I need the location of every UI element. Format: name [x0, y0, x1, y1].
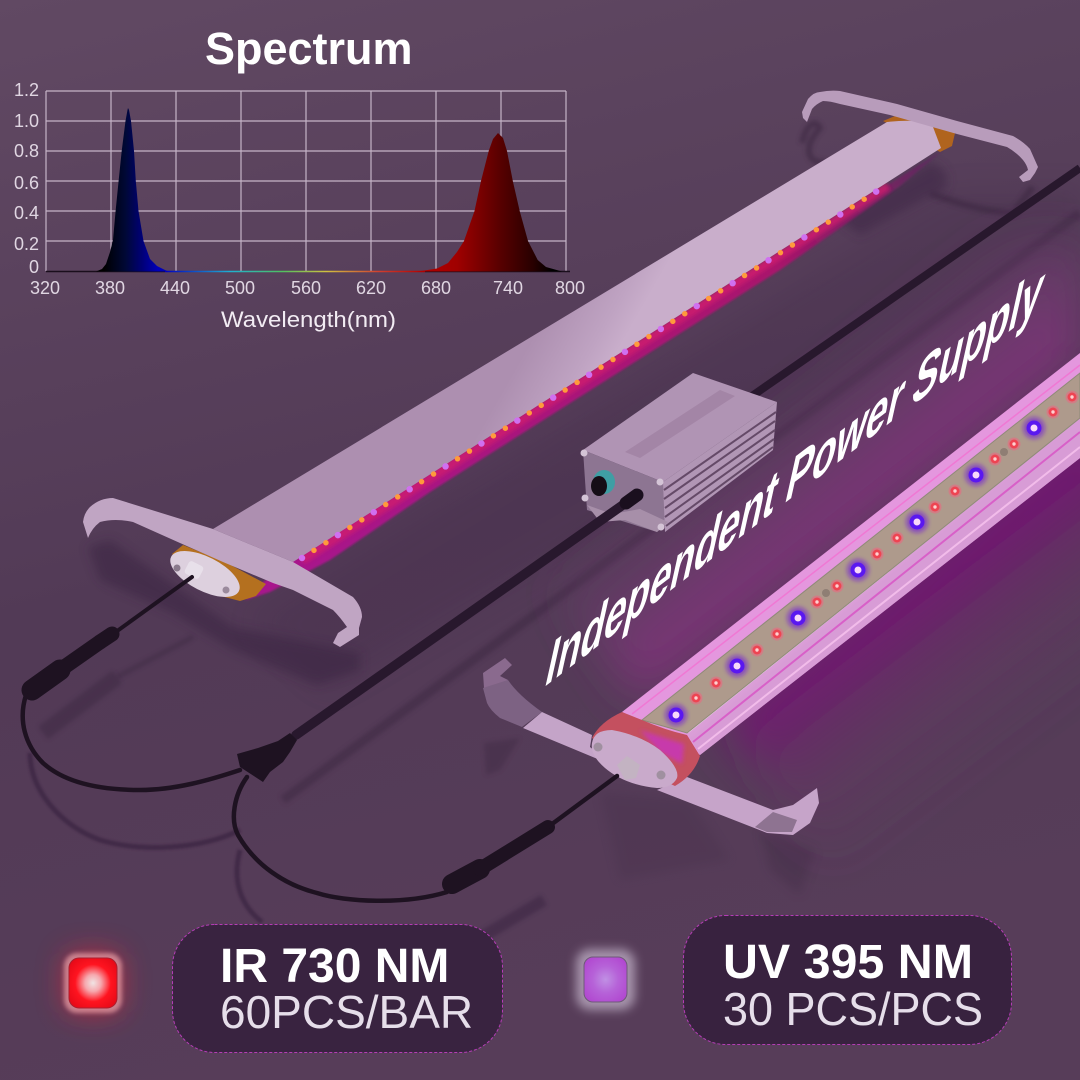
right connector cable — [234, 776, 617, 901]
IR 730 nm peak — [418, 133, 562, 272]
driver front face — [583, 450, 668, 532]
end plate with connector — [163, 542, 247, 606]
LED strip underside — [245, 150, 943, 600]
plug — [237, 733, 297, 782]
icon: red IR LED — [64, 952, 122, 1014]
x axis labels: 500 — [225, 278, 255, 298]
red LED row — [302, 184, 888, 558]
badge: UV 395 NM — [684, 916, 1012, 1044]
driver bolts — [580, 450, 664, 530]
UV LED row — [302, 184, 888, 558]
headline: Independent Power Supply: Independent Power Supply — [540, 249, 1052, 702]
badge quantity: 30 PCS/PCS — [723, 983, 983, 1035]
x axis labels — [30, 278, 585, 298]
x axis labels: 380 — [95, 278, 125, 298]
badge: IR 730 NM — [172, 924, 502, 1052]
x axis labels: 320 — [30, 278, 60, 298]
y axis labels: 1.2 — [14, 80, 39, 100]
badge quantity: 60PCS/BAR — [220, 986, 473, 1038]
strip hot line — [302, 186, 888, 560]
badge heading: UV 395 NM — [723, 936, 973, 989]
upper light bar — [83, 91, 1038, 647]
x axis labels: 680 — [421, 278, 451, 298]
bracket inner shade — [483, 680, 542, 727]
bracket right arm — [657, 777, 819, 835]
driver label — [625, 390, 735, 458]
end cap, bottom — [172, 545, 266, 601]
bracket hook — [483, 658, 512, 690]
upper rim line — [632, 365, 1080, 714]
y axis labels: 0.4 — [14, 203, 39, 223]
y axis labels: 0.6 — [14, 173, 39, 193]
chart grid — [46, 91, 566, 271]
x axis labels: 740 — [493, 278, 523, 298]
lower extruded rails — [687, 418, 1080, 755]
bracket, near end — [83, 498, 362, 647]
y axis labels: 1.0 — [14, 111, 39, 131]
x axis title: Wavelength(nm) — [221, 307, 396, 332]
bracket inner patch — [755, 812, 797, 832]
badge heading: IR 730 NM — [220, 940, 449, 993]
driver mounting flange — [587, 505, 668, 532]
mains cable, driver to top right — [752, 168, 1080, 396]
floor shadows and reflections — [30, 123, 1080, 957]
PCB — [642, 373, 1080, 733]
y axis labels: 0.2 — [14, 234, 39, 254]
driver side fins — [663, 402, 777, 532]
glow around bottom light bar — [547, 237, 1080, 890]
icon: purple UV LED — [576, 949, 635, 1010]
x axis labels: 440 — [160, 278, 190, 298]
lower light bar — [483, 353, 1080, 835]
power driver box — [580, 373, 777, 532]
y axis labels: 0 — [29, 257, 39, 277]
mains cable, plug to driver — [296, 495, 637, 735]
x axis labels: 560 — [291, 278, 321, 298]
y axis labels: 0.8 — [14, 141, 39, 161]
left connector cable — [23, 577, 240, 790]
teal connector — [591, 470, 615, 496]
bar body pink rim — [622, 353, 1080, 755]
LEDs on PCB — [665, 390, 1078, 726]
baseline spectrum line — [46, 270, 570, 272]
bar body — [213, 121, 941, 562]
cap magenta reflection — [640, 730, 684, 764]
UV 395 nm peak — [96, 108, 168, 272]
end plate — [592, 730, 677, 788]
plate bolts and gland — [594, 742, 666, 780]
bracket, far end — [802, 91, 1038, 182]
x axis labels: 620 — [356, 278, 386, 298]
driver top face — [583, 373, 777, 482]
bracket left arm — [523, 712, 612, 765]
spectrum chart — [14, 80, 585, 332]
red end cap — [592, 712, 700, 786]
y axis labels — [14, 80, 39, 277]
end cap, top — [883, 116, 955, 152]
x axis labels: 800 — [555, 278, 585, 298]
title: Spectrum: Spectrum — [205, 23, 413, 74]
